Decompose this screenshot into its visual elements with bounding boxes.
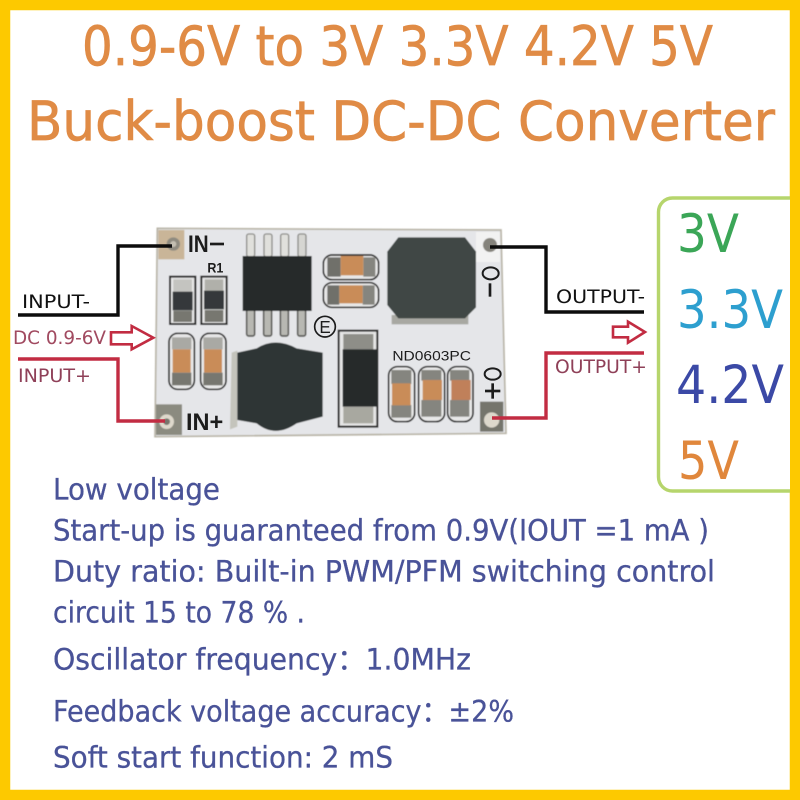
wire: output negative xyxy=(490,247,644,312)
label: OUTPUT-: OUTPUT- xyxy=(556,286,645,308)
voltage: 3V: 3V xyxy=(677,204,739,265)
feature: oscillator: Oscillator frequency：1.0MHz xyxy=(53,642,471,676)
silkscreen labels: IN+ xyxy=(186,409,223,436)
voltage: 3.3V: 3.3V xyxy=(677,280,783,341)
silkscreen labels xyxy=(186,231,501,436)
capacitors lower right xyxy=(389,367,473,422)
pad: OUT- xyxy=(476,232,500,262)
wire: output positive xyxy=(492,353,644,418)
panel: output voltages xyxy=(658,190,800,500)
label: DC 0.9-6V: DC 0.9-6V xyxy=(13,327,106,349)
title: 0.9-6V to 3V 3.3V 4.2V 5V xyxy=(82,15,713,78)
pad: IN+ xyxy=(156,404,182,435)
title xyxy=(27,15,776,153)
feature: duty ratio: Duty ratio: Built-in PWM/PFM switching control xyxy=(53,554,715,588)
panel: circuit board photo xyxy=(155,228,506,437)
feature: duty ratio continued: circuit 15 to 78 % . xyxy=(53,596,305,630)
arrow: output xyxy=(613,322,645,343)
label: OUTPUT+: OUTPUT+ xyxy=(555,356,647,378)
IC body xyxy=(243,256,312,311)
feature: feedback: Feedback voltage accuracy：±2% xyxy=(53,694,514,728)
silkscreen labels: IN xyxy=(188,231,209,258)
title: Buck-boost DC-DC Converter xyxy=(27,90,776,153)
label: INPUT+: INPUT+ xyxy=(18,365,91,387)
inductor upper right xyxy=(387,237,476,324)
feature list xyxy=(53,472,715,774)
label: INPUT-: INPUT- xyxy=(22,291,90,313)
feature: soft start: Soft start function: 2 mS xyxy=(53,740,393,774)
wire: input positive xyxy=(18,359,165,421)
board substrate xyxy=(155,228,506,437)
voltage: 4.2V: 4.2V xyxy=(676,355,784,416)
capacitors lower left xyxy=(169,333,226,389)
voltage: 5V: 5V xyxy=(678,431,739,492)
inductor lower xyxy=(230,342,323,431)
silkscreen labels: ND0603PC xyxy=(392,348,471,364)
diode xyxy=(339,331,378,427)
pad: OUT+ xyxy=(480,402,503,432)
feature: start-up: Start-up is guaranteed from 0.9V(IOUT =1 mA ) xyxy=(53,514,709,548)
pad: IN- xyxy=(158,230,184,259)
wire: input negative xyxy=(18,246,172,315)
IC pins xyxy=(247,234,306,336)
right border over panel xyxy=(790,190,800,500)
feature: low voltage: Low voltage xyxy=(53,472,220,506)
silkscreen labels: E xyxy=(319,317,331,337)
capacitors upper middle xyxy=(323,255,379,307)
arrow: input xyxy=(111,326,153,349)
resistor R1 right xyxy=(201,277,227,324)
silkscreen labels: R1 xyxy=(207,260,224,276)
resistor R1 left xyxy=(170,277,195,324)
